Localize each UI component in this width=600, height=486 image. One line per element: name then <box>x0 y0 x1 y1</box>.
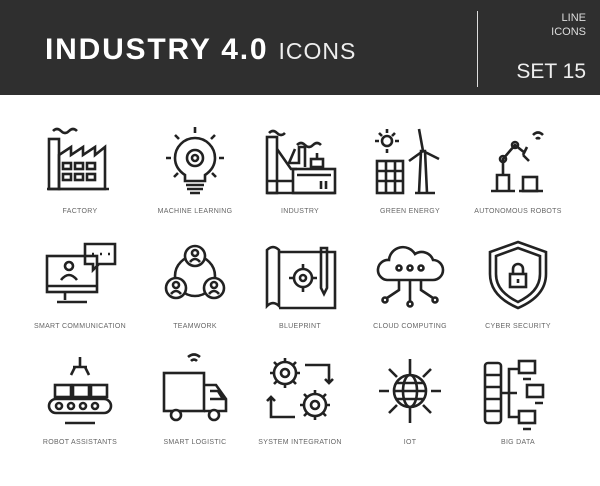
set number: SET 15 <box>516 60 586 83</box>
labels row 2 <box>34 323 551 330</box>
text: FACTORY <box>63 208 97 215</box>
icon: smart logistic <box>164 354 226 420</box>
icon: robot assistants <box>49 357 111 423</box>
header band <box>0 0 600 95</box>
icon: smart communication <box>47 244 115 302</box>
text: SMART COMMUNICATION <box>34 323 126 330</box>
text: CYBER SECURITY <box>485 323 551 330</box>
title: INDUSTRY 4.0 ICONS <box>45 33 356 66</box>
text: INDUSTRY <box>281 208 319 215</box>
text: AUTONOMOUS ROBOTS <box>474 208 562 215</box>
icon: cloud computing <box>378 247 443 306</box>
icon: iot <box>379 359 441 423</box>
divider <box>477 11 478 87</box>
text: SMART LOGISTIC <box>163 439 227 446</box>
text: TEAMWORK <box>173 323 217 330</box>
icon: big data <box>485 361 543 429</box>
text: SYSTEM INTEGRATION <box>258 439 342 446</box>
icon: autonomous robots <box>491 132 543 191</box>
icon: factory <box>47 129 109 189</box>
icon: teamwork <box>166 246 224 298</box>
icon: blueprint <box>267 247 335 308</box>
labels row 3 <box>43 439 535 446</box>
icon: cyber security <box>490 242 546 308</box>
icon: green energy <box>375 129 439 193</box>
text: MACHINE LEARNING <box>158 208 232 215</box>
subtitle: ICONS <box>551 26 586 38</box>
icon: industry <box>267 131 335 193</box>
icon: machine learning <box>166 127 224 193</box>
subtitle: LINE <box>562 12 586 24</box>
text: CLOUD COMPUTING <box>373 323 447 330</box>
text: BLUEPRINT <box>279 323 321 330</box>
labels row 1 <box>63 208 562 215</box>
text: IOT <box>404 439 416 446</box>
icon: system integration <box>267 358 333 420</box>
text: ROBOT ASSISTANTS <box>43 439 117 446</box>
text: BIG DATA <box>501 439 535 446</box>
text: GREEN ENERGY <box>380 208 440 215</box>
subtitle <box>551 12 586 38</box>
